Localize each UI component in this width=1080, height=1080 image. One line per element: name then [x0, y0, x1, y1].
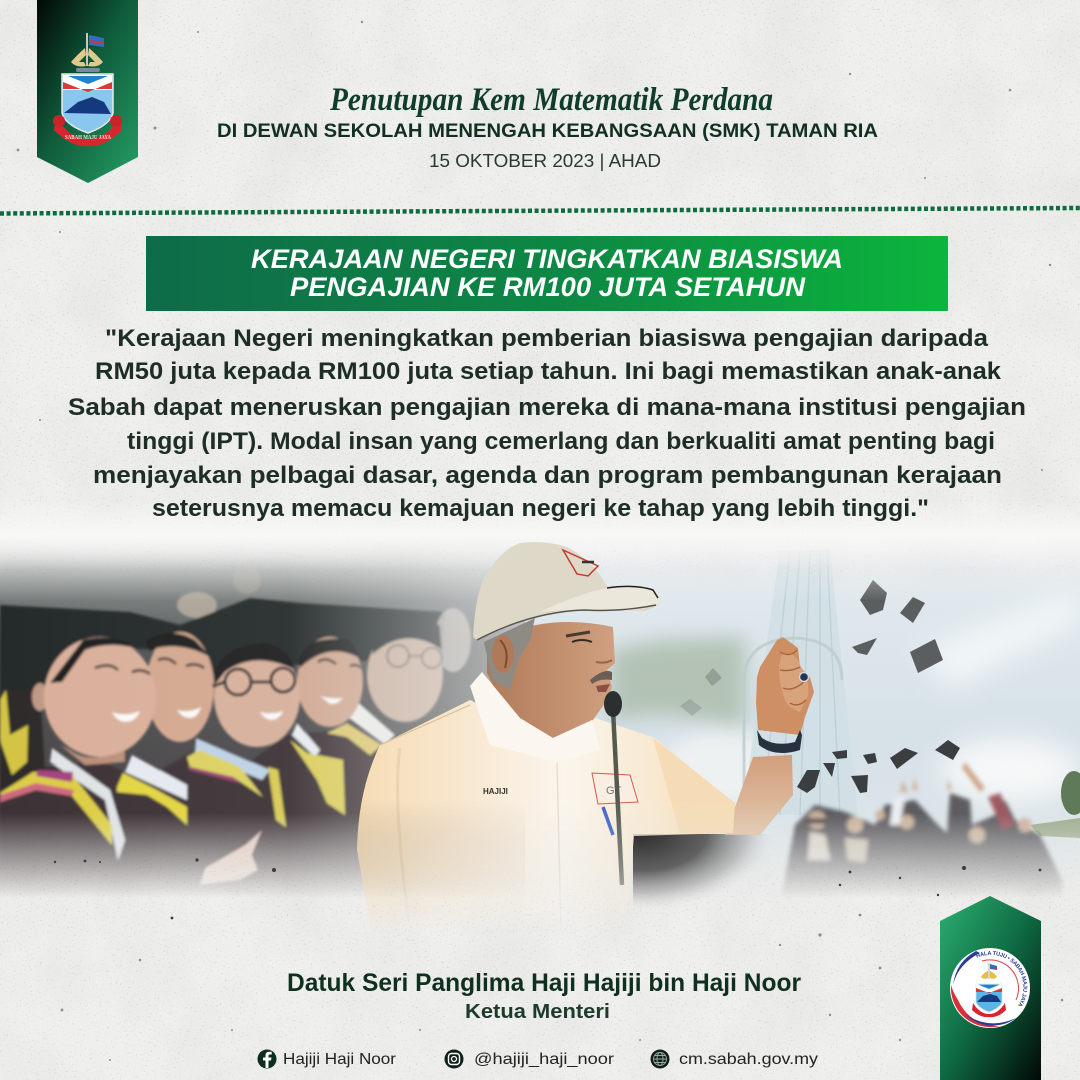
- quote text block: menjayakan pelbagai dasar, agenda dan program pembangunan kerajaan: [93, 462, 1002, 489]
- headline line 1: KERAJAAN NEGERI TINGKATKAN BIASISWA: [251, 244, 843, 274]
- name tag: [592, 773, 638, 804]
- microphone: [604, 691, 622, 885]
- mortarboard caps: [0, 598, 445, 700]
- name tag: GT: [606, 785, 622, 797]
- social links row: [258, 1050, 818, 1068]
- script title: Penutupan Kem Matematik Perdana: [329, 82, 773, 118]
- fist: [756, 637, 814, 735]
- photo: graduates on the left: [0, 551, 525, 894]
- neck and face: [487, 622, 615, 738]
- podium: [633, 834, 790, 925]
- shirt collar: [470, 672, 600, 762]
- quote text block: RM50 juta kepada RM100 juta setiap tahun. Ini bagi memastikan anak-anak: [95, 358, 1001, 385]
- stoles: [0, 772, 112, 845]
- quote text block: seterusnya memacu kemajuan negeri ke tahap yang lebih tinggi.": [152, 495, 929, 522]
- venue subtitle: DI DEWAN SEKOLAH MENENGAH KEBANGSAAN (SMK) TAMAN RIA: [217, 121, 878, 142]
- website address: cm.sabah.gov.my: [679, 1051, 818, 1068]
- pen: [603, 807, 613, 835]
- speaker name: Datuk Seri Panglima Haji Hajiji bin Haji Noor: [287, 969, 801, 997]
- quote text block: tinggi (IPT). Modal insan yang cemerlang dan berkualiti amat penting bagi: [127, 428, 995, 455]
- icon: website globe: [650, 1050, 670, 1068]
- facebook handle: Hajiji Haji Noor: [283, 1051, 397, 1068]
- quote text block: Sabah dapat meneruskan pengajian mereka di mana-mana institusi pengajian: [68, 394, 1026, 421]
- badge: Hala Tuju Sabah Maju Jaya: [950, 948, 1030, 1028]
- badge: Hala Tuju Sabah Maju Jaya: HALA TUJU • SABAH MAJU JAYA: [976, 951, 1028, 1006]
- graduate crowd: [780, 762, 1062, 905]
- icon: instagram: [444, 1050, 464, 1068]
- icon: facebook: [258, 1050, 276, 1068]
- shirt: [357, 700, 733, 935]
- crest: Sabah coat of arms: [53, 33, 122, 146]
- graduate features: [95, 645, 442, 722]
- glass tower: [742, 550, 858, 815]
- quote text block: [68, 325, 1026, 522]
- speck cluster below crowd: [54, 858, 1041, 919]
- photo: chief minister speaking: [357, 542, 814, 935]
- crest: Sabah coat of arms: SABAH MAJU JAYA: [65, 135, 112, 141]
- photo collage: graduates, chief minister, sky: [0, 500, 1080, 950]
- distant trees: [1030, 771, 1080, 838]
- photo: sky, tower and crowd on the right: [525, 554, 1080, 894]
- instagram handle: @hajiji_haji_noor: [474, 1051, 615, 1068]
- facial features: [566, 632, 612, 692]
- ribbon: bottom right with Hala Tuju badge: [940, 896, 1041, 1080]
- flying graduation caps: [680, 580, 960, 793]
- shirt name label: HAJIJI: [483, 787, 508, 796]
- raised arm: [725, 755, 793, 835]
- speaker title: Ketua Menteri: [465, 1001, 610, 1023]
- crest small: [972, 963, 1006, 1017]
- ribbon: top left with state crest: [37, 0, 138, 183]
- watch: [757, 730, 802, 753]
- headline line 2: PENGAJIAN KE RM100 JUTA SETAHUN: [290, 272, 806, 302]
- baseball cap: [473, 542, 659, 640]
- gowns: [0, 731, 379, 859]
- headline banner: [146, 236, 948, 311]
- distant faces: [177, 592, 217, 618]
- soft white blend at top of photo: [0, 500, 1080, 570]
- graduates hand: [200, 830, 262, 885]
- quote text block: "Kerajaan Negeri meningkatkan pemberian biasiswa pengajian daripada: [105, 325, 988, 352]
- date: 15 OKTOBER 2023 | AHAD: [429, 151, 661, 171]
- faces: [435, 608, 471, 672]
- collars: [50, 748, 125, 860]
